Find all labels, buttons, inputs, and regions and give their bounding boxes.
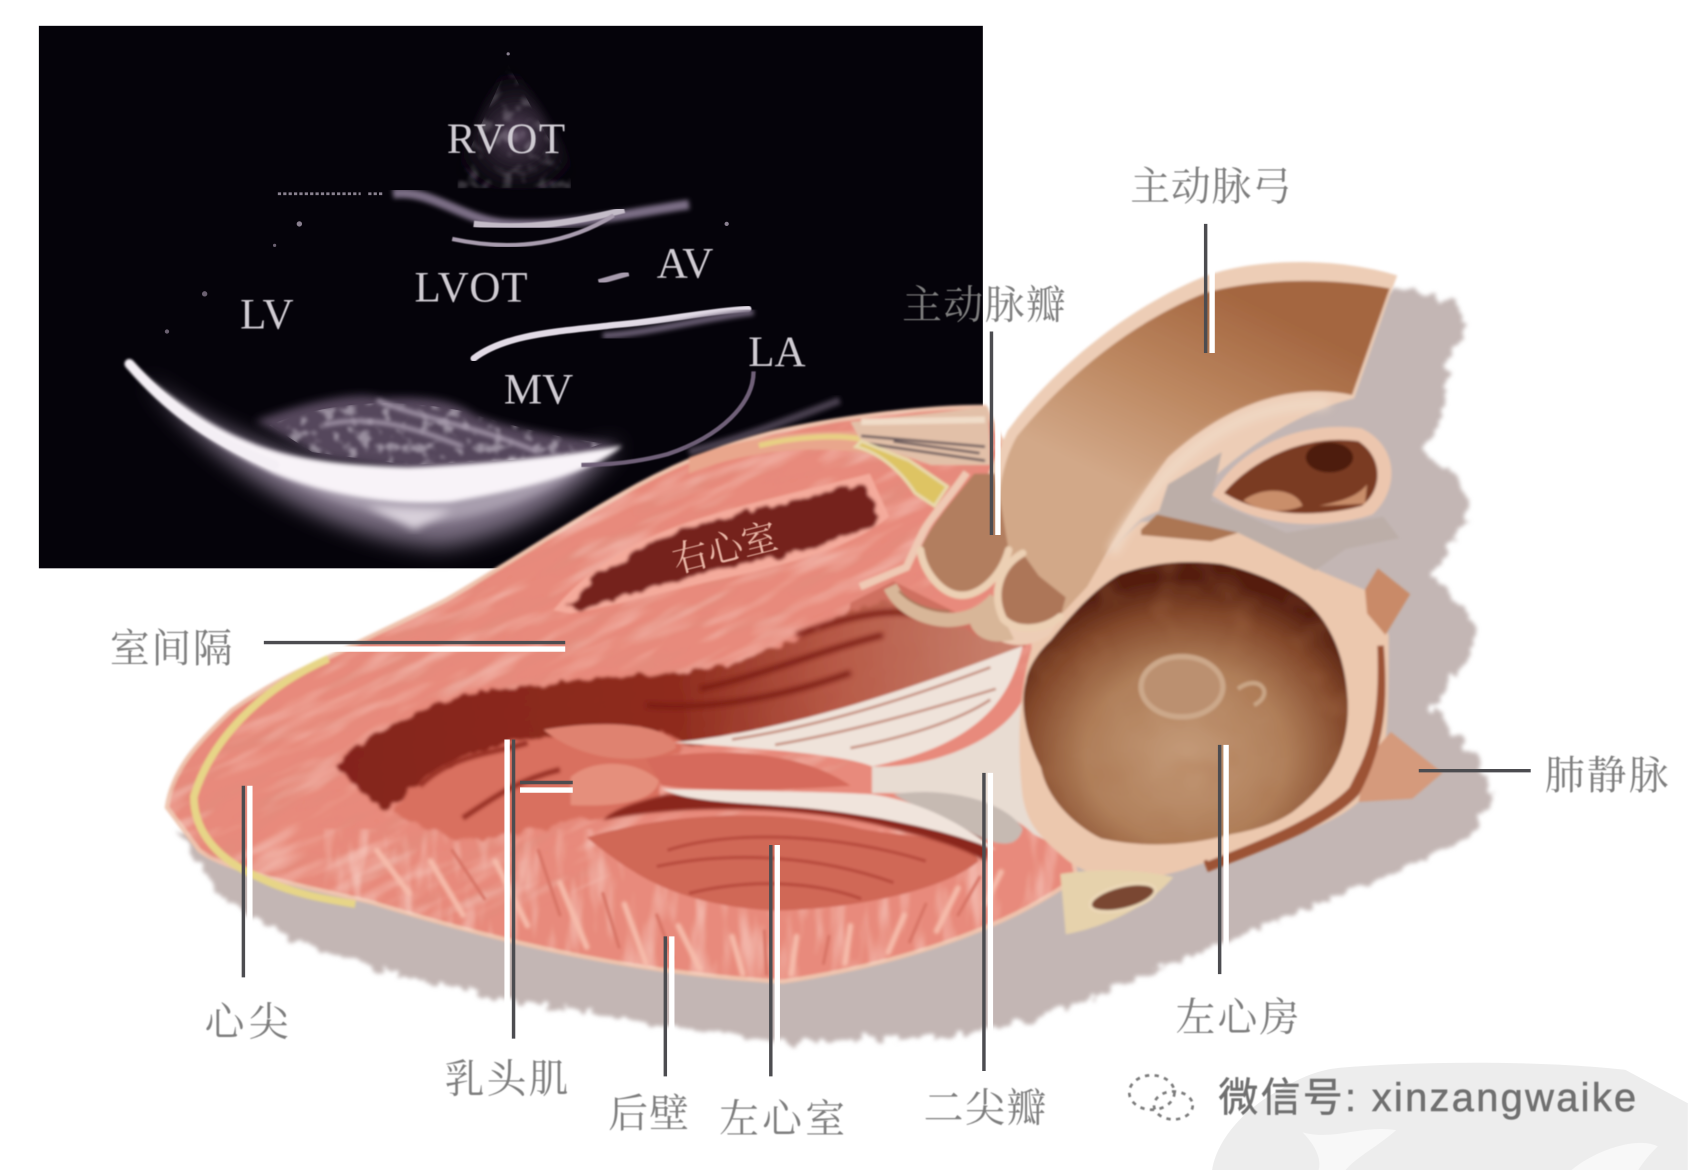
wall fibres bbox=[377, 850, 1001, 974]
line: papillary muscle bbox=[507, 739, 573, 1039]
anatomical labels: 主动脉弓 bbox=[1130, 165, 1292, 209]
line: septum bbox=[264, 643, 565, 649]
watermark text: 微信号: xinzangwaike bbox=[1219, 1076, 1636, 1120]
brown aortic root and left cusp interior bbox=[920, 474, 1009, 595]
left atrium wall bbox=[1019, 521, 1389, 879]
anatomical labels: 后壁 bbox=[608, 1092, 689, 1136]
coronary sinus bbox=[1060, 870, 1173, 934]
icon: WeChat logo bbox=[1129, 1075, 1193, 1119]
anatomical labels: 乳头肌 bbox=[445, 1058, 568, 1102]
cast shadow under the heart bbox=[178, 288, 1493, 1042]
epicardial fat spot bbox=[856, 441, 947, 506]
mitral valve central white tissue bbox=[872, 700, 1076, 856]
ultrasound sector apex glow bbox=[447, 54, 587, 188]
papillary muscles bbox=[393, 729, 680, 840]
myocardium body bbox=[167, 407, 1076, 982]
aortic arch outer wall bbox=[988, 262, 1397, 645]
ultrasound labels: LVOT bbox=[415, 264, 528, 311]
right ventricle cavity with pale endocardium bbox=[553, 474, 889, 614]
anatomical labels: 左心室 bbox=[719, 1097, 845, 1141]
ultrasound labels: RVOT bbox=[447, 116, 565, 163]
anatomical labels: 左心房 bbox=[1176, 996, 1299, 1040]
mitral valve anterior leaflet bbox=[673, 646, 1023, 766]
fossa ovalis bbox=[1141, 657, 1223, 717]
anatomical labels: 二尖瓣 bbox=[924, 1087, 1046, 1131]
anatomical labels: 肺静脉 bbox=[1545, 754, 1669, 798]
apex fat layer bbox=[194, 659, 355, 904]
left ventricle cavity lower bbox=[587, 815, 979, 911]
ultrasound tissue echoes bbox=[129, 52, 840, 547]
pale wall strip right of right ventricle bbox=[860, 473, 967, 587]
pulmonary vein stub upper bbox=[1365, 568, 1410, 635]
ultrasound labels bbox=[240, 116, 806, 414]
line: mitral valve bbox=[984, 773, 990, 1071]
panel: ultrasound echocardiogram bbox=[39, 26, 983, 568]
muscle fibre texture bbox=[168, 412, 1058, 980]
slit under mitral valve bbox=[603, 793, 987, 861]
left atrium interior bbox=[1023, 562, 1348, 844]
mitral valve posterior leaflet bbox=[662, 789, 996, 850]
top tan wall of right ventricle bbox=[689, 431, 926, 474]
line: left ventricle bbox=[771, 845, 777, 1076]
transverse sinus wedge bbox=[1141, 514, 1238, 541]
valve pocket bbox=[894, 792, 1023, 844]
anatomical labels: 室间隔 bbox=[110, 627, 233, 671]
grey gap between aorta and atrium bbox=[1157, 452, 1399, 570]
line: aortic valve bbox=[991, 332, 998, 535]
aortic arch highlight bbox=[1114, 404, 1324, 549]
line: apex bbox=[243, 786, 250, 977]
right pulmonary artery section bbox=[1212, 427, 1391, 524]
line: left atrium bbox=[1220, 745, 1226, 974]
anatomical labels bbox=[110, 165, 1669, 1141]
ultrasound labels: LA bbox=[748, 329, 806, 376]
watermark background mark bbox=[1212, 1063, 1688, 1170]
illustration: heart cross-section bbox=[164, 260, 1443, 985]
aortic valve cusps bbox=[890, 474, 1066, 642]
line: aortic arch bbox=[1206, 224, 1212, 353]
anatomical labels: 主动脉瓣 bbox=[902, 284, 1066, 328]
top band with dark stripes and pale tissue bbox=[850, 407, 990, 465]
outer dark rim of left atrium bbox=[1206, 646, 1380, 866]
pulmonary vein stub lower bbox=[1358, 732, 1442, 802]
outer halo below the bright arc bbox=[145, 377, 619, 547]
left ventricle cavity upper dark band bbox=[336, 600, 1023, 809]
ultrasound labels: MV bbox=[504, 367, 573, 414]
ultrasound labels: AV bbox=[657, 241, 713, 288]
outflow slot between leaflets bbox=[646, 753, 850, 790]
ultrasound labels: LV bbox=[240, 291, 294, 338]
anatomical labels: 心尖 bbox=[205, 1000, 289, 1044]
line: posterior wall bbox=[665, 936, 672, 1076]
red-brown region above left ventricle outflow bbox=[840, 581, 1028, 689]
leader lines bbox=[243, 224, 1531, 1076]
label: right ventricle: 右心室 bbox=[668, 516, 781, 580]
speckled myocardium bbox=[255, 396, 619, 474]
bright posterior wall bbox=[129, 362, 622, 503]
aortic arch interior bbox=[996, 281, 1390, 616]
line: pulmonary vein bbox=[1419, 769, 1531, 772]
